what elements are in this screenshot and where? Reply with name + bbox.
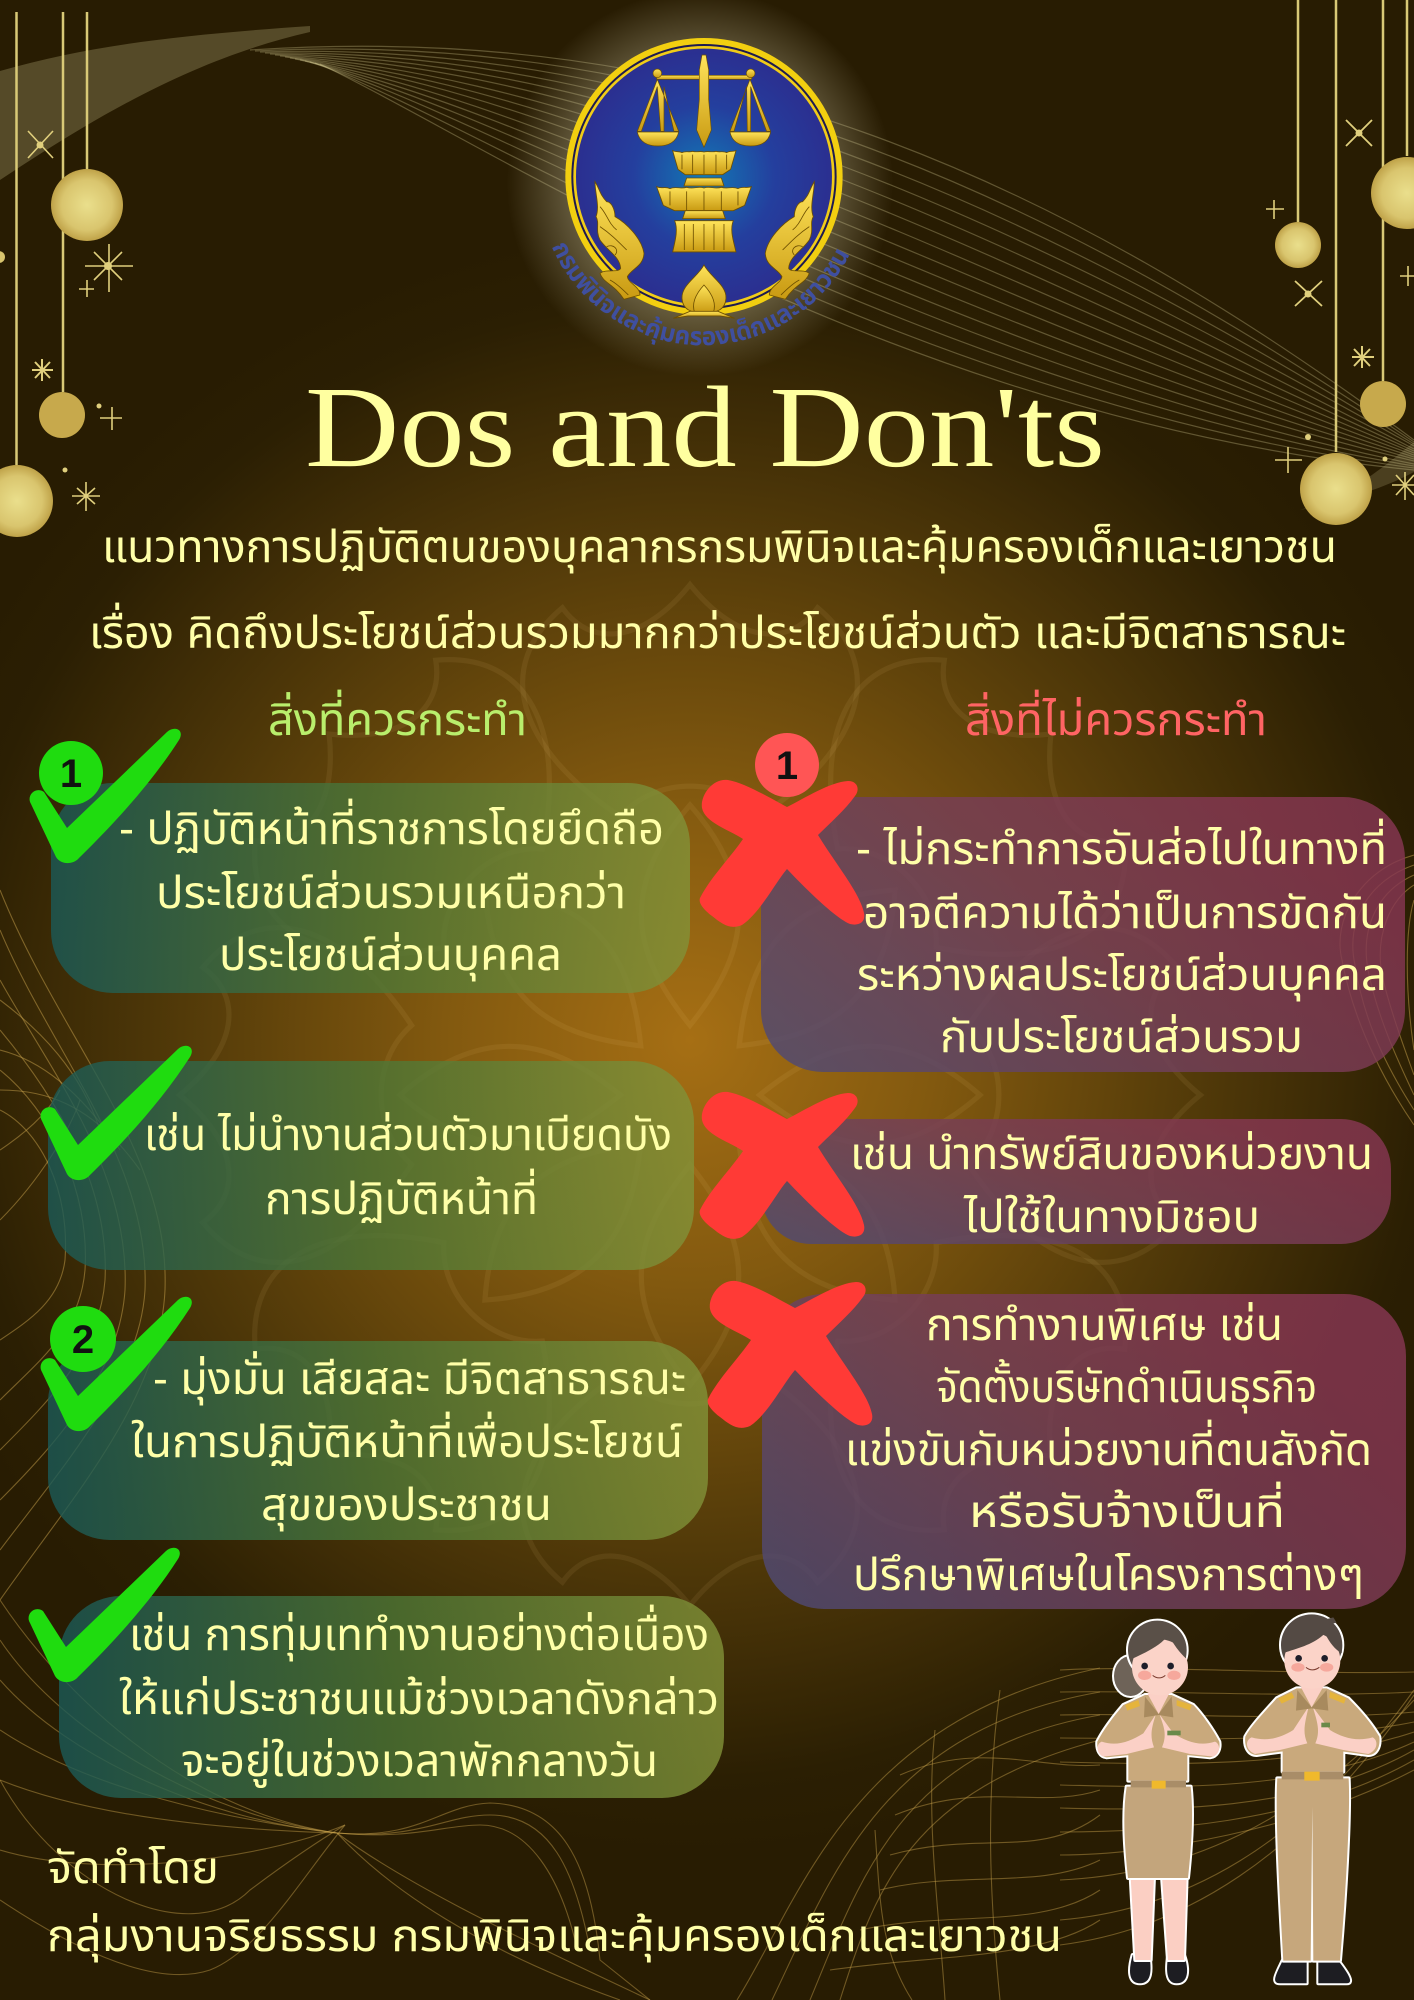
panel: don't 1: อาจตีความได้ว่าเป็นการขัดกัน (863, 887, 1387, 938)
wave mesh right (1340, 855, 1414, 1125)
subtitle: เรื่อง คิดถึงประโยชน์ส่วนรวมมากกว่าประโยชน์ส่วนตัว และมีจิตสาธารณะ (89, 602, 1346, 658)
icon: cross 2 (700, 1092, 864, 1239)
footer credit: จัดทำโดย (47, 1842, 219, 1893)
panel: don't 2: การทำงานพิเศษ เช่น (926, 1299, 1283, 1350)
icon: check 2 (41, 1046, 192, 1180)
icon: check 4 (29, 1548, 180, 1682)
panel: don't 1 example: ไปใช้ในทางมิชอบ (963, 1191, 1260, 1242)
wave mesh bottom (0, 1600, 1414, 2000)
subtitle (89, 521, 1346, 658)
footer credit (47, 1842, 1062, 1963)
panel: don't 2 (762, 1294, 1406, 1609)
panel: don't 2: หรือรับจ้างเป็นที่ (969, 1481, 1285, 1537)
panel: do 2 (48, 1341, 708, 1540)
panel: don't 2: แข่งขันกับหน่วยงานที่ตนสังกัด (845, 1419, 1372, 1475)
icon: lower lotus (673, 265, 735, 318)
icon: naga right (765, 182, 814, 299)
panel: do 2: - มุ่งมั่น เสียสละ มีจิตสาธารณะ (153, 1351, 686, 1406)
panel: do 2 example: จะอยู่ในช่วงเวลาพักกลางวัน (181, 1735, 658, 1788)
icon: check 3 (41, 1297, 192, 1431)
icon: cross 3 (708, 1281, 872, 1428)
logo: department emblem: กรมพินิจและคุ้มครองเด็กและเยาวชน (552, 243, 850, 346)
panel: do 1 (51, 783, 690, 993)
panel: don't 1: - ไม่กระทำการอันส่อไปในทางที่ (856, 818, 1387, 874)
icon: scales (637, 55, 771, 147)
panel: do 1 example (48, 1061, 694, 1270)
panel: don't 2: ปรึกษาพิเศษในโครงการต่างๆ (853, 1549, 1364, 1600)
panel: do 2 example: เช่น การทุ่มเททำงานอย่างต่อเนื่อง (129, 1604, 709, 1662)
panel: do 1 example: เช่น ไม่นำงานส่วนตัวมาเบียดบัง (144, 1109, 672, 1160)
wave mesh left (0, 890, 165, 1600)
icon: number badge 1 green (39, 741, 103, 805)
panel: do 2: สุขของประชาชน (261, 1479, 552, 1532)
icon: lotus pedestal (657, 151, 751, 252)
panel: don't 2: จัดตั้งบริษัทดำเนินธุรกิจ (936, 1359, 1317, 1414)
icon: check 1 (30, 729, 181, 863)
panel: don't 1: ระหว่างผลประโยชน์ส่วนบุคคล (857, 949, 1387, 1002)
heading: don'ts: สิ่งที่ไม่ควรกระทำ (965, 689, 1267, 745)
panel: don't 1 example (761, 1119, 1391, 1244)
illustration: male officer (1245, 1614, 1380, 1983)
icon: number badge 1 red (755, 733, 819, 797)
icon: number badge 1 red: 1 (776, 744, 798, 788)
illustration: female officer (1097, 1621, 1220, 1983)
panel: do 1: ประโยชน์ส่วนรวมเหนือกว่า (156, 867, 626, 918)
icon: number badge 2 green (50, 1306, 116, 1372)
panel: do 2: ในการปฏิบัติหน้าที่เพื่อประโยชน์ (131, 1411, 683, 1467)
icon: number badge 1 green: 1 (60, 752, 82, 796)
decoration: left hanging ornaments (0, 12, 133, 537)
mandala pattern (180, 585, 1200, 1605)
panel: don't 1 (761, 797, 1405, 1072)
panel: do 1 example: การปฏิบัติหน้าที่ (265, 1168, 538, 1224)
heading: dos: สิ่งที่ควรกระทำ (268, 689, 527, 745)
title: Dos and Don'ts (305, 364, 1105, 492)
panel: do 2 example: ให้แก่ประชาชนแม้ช่วงเวลาดังกล่าว (119, 1673, 719, 1724)
panel: don't 1 example: เช่น นำทรัพย์สินของหน่วยงาน (850, 1128, 1373, 1179)
icon: cross 1 (700, 780, 864, 927)
wave band top (0, 26, 1414, 510)
icon: naga left (595, 182, 644, 299)
footer credit: กลุ่มงานจริยธรรม กรมพินิจและคุ้มครองเด็กและเยาวชน (47, 1910, 1062, 1963)
panel: do 2 example (59, 1596, 724, 1798)
logo curved text (552, 247, 853, 345)
logo: department emblem (516, 0, 885, 368)
decoration: right hanging ornaments (1266, 0, 1414, 525)
panel: don't 1: กับประโยชน์ส่วนรวม (940, 1011, 1303, 1062)
panel: do 1: ประโยชน์ส่วนบุคคล (219, 929, 562, 982)
subtitle: แนวทางการปฏิบัติตนของบุคลากรกรมพินิจและคุ้มครองเด็กและเยาวชน (102, 521, 1337, 574)
icon: number badge 2 green: 2 (72, 1318, 94, 1362)
panel: do 1: - ปฏิบัติหน้าที่ราชการโดยยึดถือ (119, 798, 664, 854)
